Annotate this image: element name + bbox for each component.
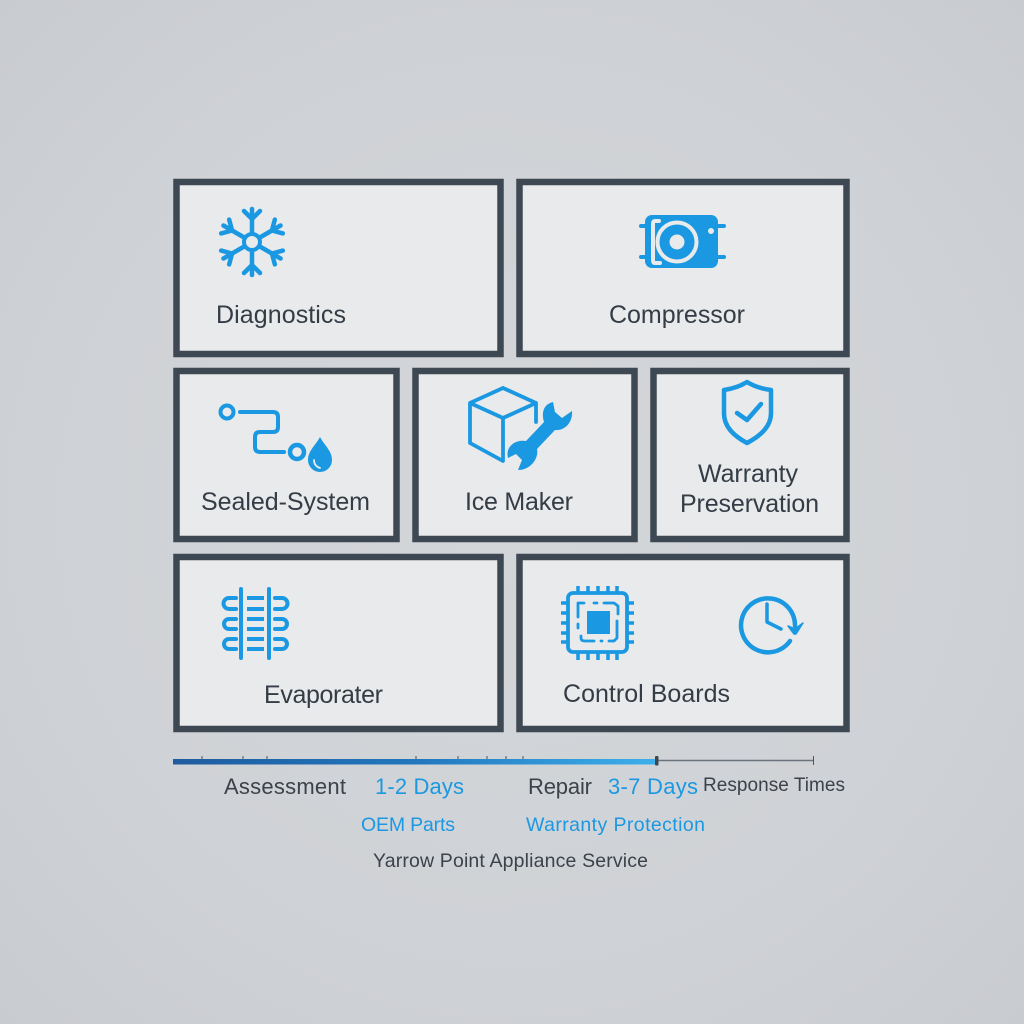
icon: clock with arrow xyxy=(741,598,803,652)
panel: compressor xyxy=(520,182,846,354)
label: Warranty Preservation: Warranty xyxy=(698,460,798,488)
label: company name: Yarrow Point Appliance Service xyxy=(373,850,648,872)
label: Assessment: Assessment xyxy=(224,774,346,799)
label: Control Boards: Control Boards xyxy=(563,680,730,708)
panel: sealed-system xyxy=(176,371,396,539)
panel: ice maker xyxy=(416,371,634,539)
label: Warranty Preservation: Preservation xyxy=(680,490,819,518)
icon: circuit chip xyxy=(561,586,634,660)
panel: warranty preservation xyxy=(654,371,846,539)
label: Compressor: Compressor xyxy=(609,301,745,329)
panel: control boards xyxy=(520,557,846,729)
label: Ice Maker: Ice Maker xyxy=(465,488,573,516)
icon: evaporator coil xyxy=(224,589,288,658)
timeline bar xyxy=(173,756,814,766)
panel: evaporator xyxy=(176,557,500,729)
label: Repair: Repair xyxy=(528,774,592,799)
label: Warranty Protection: Warranty Protection xyxy=(526,814,705,836)
icon: refrigerant line and drop xyxy=(220,406,332,472)
label: 3-7 Days: 3-7 Days xyxy=(608,774,698,799)
label: 1-2 Days: 1-2 Days xyxy=(375,774,464,799)
label: Evaporater: Evaporater xyxy=(264,681,383,709)
icon: ice cube and wrench xyxy=(470,388,572,470)
label: Warranty Preservation xyxy=(680,460,819,518)
label: Sealed-System: Sealed-System xyxy=(201,488,370,516)
icon: compressor xyxy=(641,215,724,268)
panel: diagnostics xyxy=(176,182,500,354)
label: Diagnostics: Diagnostics xyxy=(216,301,346,329)
label: Response Times: Response Times xyxy=(703,775,845,796)
icon: shield with check xyxy=(724,382,771,443)
label: OEM Parts: OEM Parts xyxy=(361,814,455,836)
icon: snowflake xyxy=(219,209,285,275)
